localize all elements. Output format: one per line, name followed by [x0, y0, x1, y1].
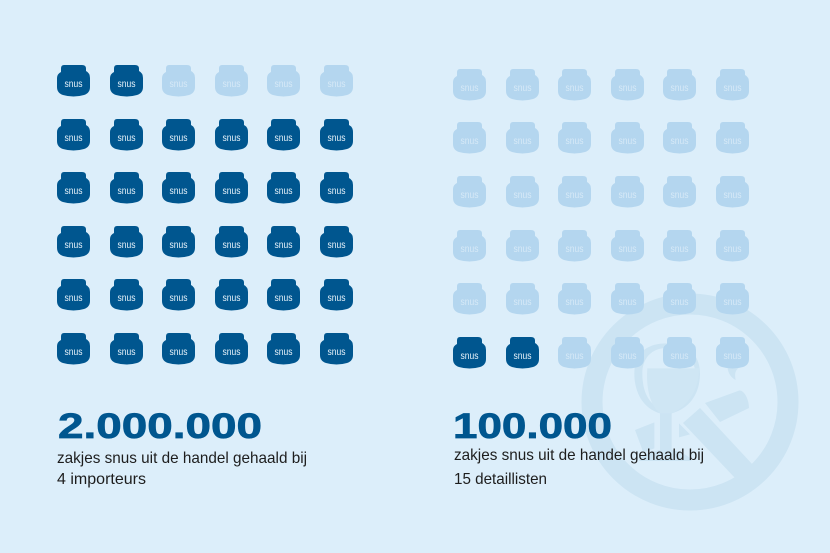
- icon: snus tin: [267, 172, 300, 204]
- icon: snus tin faded: snus: [724, 244, 742, 255]
- icon: snus tin: snus: [64, 79, 82, 90]
- icon: snus tin faded: snus: [724, 83, 742, 94]
- row 3: [57, 172, 353, 204]
- icon: snus tin: snus: [274, 347, 292, 358]
- icon: snus tin faded: snus: [618, 297, 636, 308]
- icon: snus tin faded: [506, 176, 539, 208]
- icon: snus tin faded: snus: [670, 351, 688, 362]
- icon: snus tin: snus: [274, 293, 292, 304]
- icon: snus tin faded: [506, 122, 539, 154]
- icon: snus tin: [162, 333, 195, 364]
- icon: snus tin: [267, 279, 300, 310]
- icon: snus tin: snus: [222, 186, 240, 197]
- icon: snus tin: [57, 65, 90, 96]
- text block: retailers description: 15 detaillisten: [454, 471, 547, 488]
- icon: snus tin: [267, 226, 300, 258]
- icon: snus tin faded: [611, 176, 644, 208]
- icon: snus tin: snus: [64, 293, 82, 304]
- icon: snus tin: snus: [274, 133, 292, 144]
- row 2: [453, 122, 749, 154]
- row 4: [57, 226, 353, 258]
- icon: snus tin faded: snus: [618, 244, 636, 255]
- icon: snus tin faded: snus: [618, 190, 636, 201]
- icon: snus tin faded: snus: [670, 136, 688, 147]
- icon: snus tin faded: snus: [328, 79, 346, 90]
- icon: snus tin: snus: [460, 351, 478, 362]
- row 5: [57, 279, 353, 310]
- icon: snus tin faded: [162, 65, 195, 96]
- text block: retailers description: zakjes snus uit de handel gehaald bij: [454, 447, 704, 464]
- icon: snus tin faded: snus: [670, 297, 688, 308]
- icon: snus tin: [215, 279, 248, 310]
- icon: snus tin: [162, 119, 195, 150]
- panel: retailers icon grid: [453, 69, 749, 368]
- icon: snus tin: [267, 119, 300, 150]
- icon: snus tin faded: snus: [514, 190, 532, 201]
- icon: snus tin faded: [716, 283, 749, 314]
- icon: snus tin: [320, 119, 353, 150]
- icon: snus tin faded: [558, 337, 591, 368]
- row 2: [57, 119, 353, 150]
- icon: snus tin faded: snus: [170, 79, 188, 90]
- icon: snus tin: [215, 119, 248, 150]
- icon: snus tin faded: [611, 230, 644, 262]
- icon: snus tin faded: [611, 337, 644, 368]
- icon: snus tin faded: [558, 69, 591, 100]
- icon: snus tin faded: [611, 69, 644, 100]
- icon: snus tin: snus: [222, 133, 240, 144]
- icon: snus tin: [110, 279, 143, 310]
- icon: snus tin: snus: [64, 240, 82, 251]
- icon: snus tin: snus: [170, 186, 188, 197]
- icon: snus tin faded: [558, 230, 591, 262]
- icon: snus tin faded: snus: [618, 83, 636, 94]
- icon: snus tin: snus: [514, 351, 532, 362]
- icon: snus tin faded: snus: [724, 351, 742, 362]
- icon: snus tin faded: [558, 122, 591, 154]
- icon: snus tin faded: snus: [618, 351, 636, 362]
- icon: snus tin: snus: [170, 293, 188, 304]
- icon: snus tin faded: [663, 122, 696, 154]
- text block: importers description: zakjes snus uit de handel gehaald bij: [57, 450, 307, 467]
- icon: prohibition sign with glass and cigarette watermark: [592, 304, 788, 500]
- icon: snus tin faded: snus: [460, 244, 478, 255]
- icon: snus tin: snus: [170, 347, 188, 358]
- icon: snus tin faded: [506, 283, 539, 314]
- icon: snus tin faded: [453, 69, 486, 100]
- icon: snus tin: [110, 119, 143, 150]
- icon: snus tin: snus: [328, 347, 346, 358]
- icon: snus tin faded: snus: [724, 297, 742, 308]
- icon: snus tin faded: [716, 230, 749, 262]
- icon: snus tin faded: [453, 283, 486, 314]
- icon: snus tin faded: [611, 283, 644, 314]
- icon: snus tin faded: [716, 69, 749, 100]
- panel: importers icon grid: [57, 65, 353, 364]
- icon: snus tin: [267, 333, 300, 364]
- icon: snus tin faded: snus: [724, 136, 742, 147]
- icon: snus tin faded: [506, 69, 539, 100]
- icon: snus tin: [215, 226, 248, 258]
- icon: snus tin faded: [215, 65, 248, 96]
- icon: snus tin: [162, 279, 195, 310]
- icon: snus tin faded: snus: [670, 244, 688, 255]
- icon: snus tin: snus: [118, 79, 136, 90]
- icon: snus tin faded: [663, 337, 696, 368]
- icon: snus tin faded: snus: [566, 136, 584, 147]
- icon: snus tin faded: [453, 176, 486, 208]
- icon: snus tin faded: snus: [460, 297, 478, 308]
- icon: snus tin faded: [267, 65, 300, 96]
- icon: snus tin: snus: [118, 186, 136, 197]
- icon: snus tin faded: snus: [514, 136, 532, 147]
- icon: snus tin: [215, 172, 248, 204]
- row 3: [453, 176, 749, 208]
- icon: snus tin: [320, 279, 353, 310]
- icon: snus tin: [57, 119, 90, 150]
- icon: snus tin faded: [663, 69, 696, 100]
- icon: snus tin: snus: [170, 240, 188, 251]
- icon: snus tin: snus: [118, 240, 136, 251]
- icon: snus tin: snus: [328, 240, 346, 251]
- icon: snus tin faded: [716, 176, 749, 208]
- icon: snus tin: [110, 333, 143, 364]
- icon: snus tin faded: snus: [566, 297, 584, 308]
- icon: snus tin faded: [506, 230, 539, 262]
- row 4: [453, 230, 749, 262]
- row 6: [57, 333, 353, 364]
- icon: snus tin faded: snus: [670, 190, 688, 201]
- icon: snus tin faded: snus: [222, 79, 240, 90]
- icon: snus tin: snus: [64, 186, 82, 197]
- icon: snus tin: snus: [328, 293, 346, 304]
- icon: snus tin faded: snus: [566, 83, 584, 94]
- icon: snus tin: [162, 172, 195, 204]
- heading: importers number: 2.000.000: [58, 407, 262, 446]
- icon: snus tin faded: snus: [566, 190, 584, 201]
- icon: snus tin: [57, 226, 90, 258]
- icon: snus tin: snus: [274, 186, 292, 197]
- icon: snus tin faded: snus: [566, 351, 584, 362]
- icon: snus tin faded: [663, 283, 696, 314]
- icon: snus tin: snus: [118, 133, 136, 144]
- text block: retailers description: [454, 447, 704, 488]
- icon: snus tin faded: snus: [566, 244, 584, 255]
- icon: snus tin faded: snus: [460, 136, 478, 147]
- icon: snus tin faded: [611, 122, 644, 154]
- icon: snus tin: [162, 226, 195, 258]
- icon: snus tin: [453, 337, 486, 368]
- icon: snus tin: [215, 333, 248, 364]
- row 6: [453, 337, 749, 368]
- icon: snus tin faded: snus: [274, 79, 292, 90]
- icon: snus tin faded: snus: [514, 83, 532, 94]
- icon: snus tin: [57, 333, 90, 364]
- icon: snus tin faded: [558, 176, 591, 208]
- icon: snus tin faded: [453, 230, 486, 262]
- icon: snus tin: [110, 172, 143, 204]
- icon: snus tin faded: [663, 230, 696, 262]
- icon: snus tin: [320, 172, 353, 204]
- icon: snus tin: snus: [118, 347, 136, 358]
- row 5: [453, 283, 749, 314]
- icon: snus tin faded: snus: [514, 297, 532, 308]
- text block: importers description: 4 importeurs: [57, 471, 146, 488]
- icon: snus tin faded: snus: [514, 244, 532, 255]
- icon: snus tin: snus: [328, 186, 346, 197]
- icon: snus tin: snus: [328, 133, 346, 144]
- icon: snus tin faded: [453, 122, 486, 154]
- icon: snus tin faded: [320, 65, 353, 96]
- icon: snus tin: snus: [118, 293, 136, 304]
- icon: snus tin: [110, 65, 143, 96]
- icon: snus tin: [506, 337, 539, 368]
- row 1: [57, 65, 353, 96]
- text block: importers description: [57, 450, 307, 488]
- icon: snus tin: snus: [64, 133, 82, 144]
- icon: snus tin: snus: [222, 347, 240, 358]
- icon: snus tin: [320, 226, 353, 258]
- icon: snus tin: snus: [170, 133, 188, 144]
- icon: snus tin: [57, 172, 90, 204]
- icon: snus tin: snus: [222, 240, 240, 251]
- icon: snus tin faded: snus: [460, 190, 478, 201]
- icon: snus tin faded: [663, 176, 696, 208]
- icon: snus tin: snus: [274, 240, 292, 251]
- icon: snus tin faded: snus: [460, 83, 478, 94]
- icon: snus tin: snus: [222, 293, 240, 304]
- row 1: [453, 69, 749, 100]
- icon: snus tin faded: snus: [724, 190, 742, 201]
- icon: snus tin: [57, 279, 90, 310]
- icon: snus tin: [320, 333, 353, 364]
- icon: snus tin: snus: [64, 347, 82, 358]
- icon: snus tin faded: [716, 337, 749, 368]
- icon: snus tin faded: snus: [618, 136, 636, 147]
- icon: snus tin: [110, 226, 143, 258]
- icon: snus tin faded: [558, 283, 591, 314]
- icon: snus tin faded: [716, 122, 749, 154]
- icon: snus tin faded: snus: [670, 83, 688, 94]
- heading: retailers number: 100.000: [453, 407, 612, 446]
